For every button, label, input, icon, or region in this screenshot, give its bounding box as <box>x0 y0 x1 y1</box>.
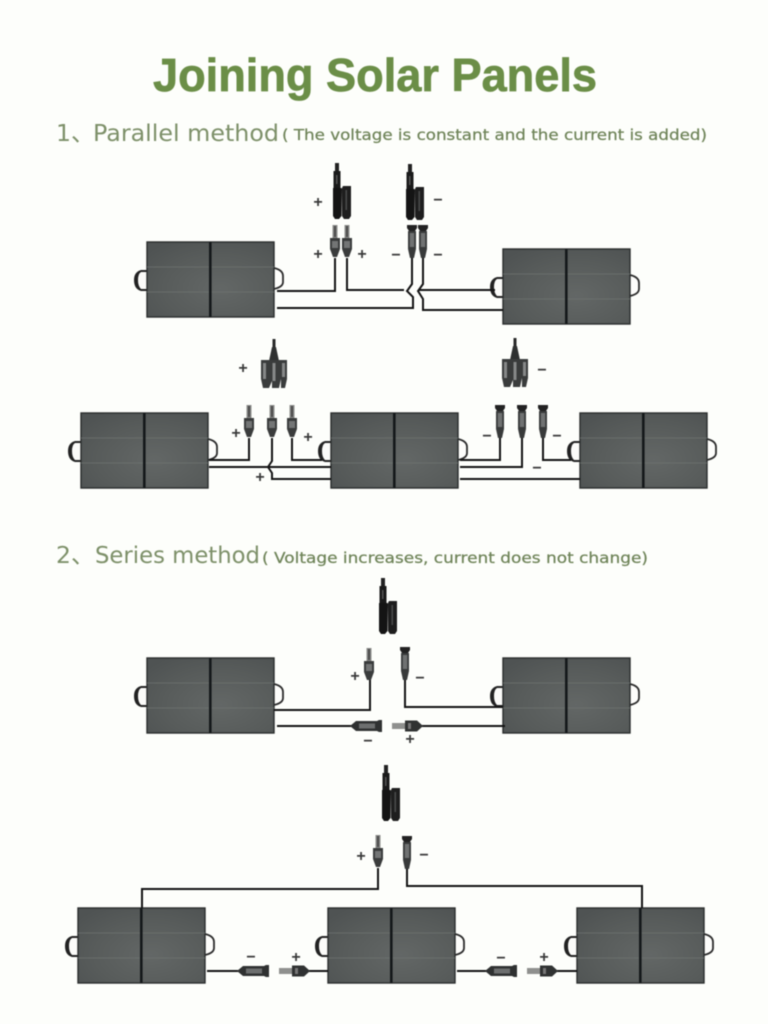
panel: middle solar panel <box>318 413 467 488</box>
polarity labels: − <box>363 733 373 750</box>
polarity labels: + <box>238 360 248 377</box>
connector: plus <box>373 835 383 867</box>
connector: horizontal minus <box>350 720 382 732</box>
connectors: two-way Y minus <box>406 164 424 220</box>
polarity labels: + <box>356 848 366 865</box>
heading: series method: Series method <box>95 541 260 569</box>
polarity labels: + <box>231 425 241 442</box>
connector: horizontal plus <box>392 720 423 732</box>
connector: Y joint <box>379 578 397 634</box>
polarity labels: + <box>255 469 265 486</box>
connector: horizontal plus 1 <box>279 966 310 976</box>
connectors: plus pair <box>330 225 352 257</box>
connector: minus <box>402 836 412 869</box>
connector: horizontal minus 1 <box>237 965 269 977</box>
title: Joining Solar Panels <box>153 49 597 101</box>
polarity labels: − <box>552 428 562 445</box>
polarity labels: + <box>357 246 367 263</box>
connector: horizontal minus 2 <box>485 965 517 977</box>
connectors: three-way minus <box>502 338 528 387</box>
polarity labels: − <box>391 247 401 264</box>
heading: series method <box>56 541 648 569</box>
polarity labels: − <box>532 460 542 477</box>
connectors: plus row <box>244 405 297 437</box>
polarity labels: + <box>303 429 313 446</box>
polarity labels <box>246 847 549 967</box>
panel: right solar panel <box>490 658 639 733</box>
polarity labels: + <box>405 731 415 748</box>
polarity labels: + <box>291 949 301 966</box>
heading: parallel method: Parallel method <box>93 119 279 147</box>
panel: middle solar panel <box>315 908 464 983</box>
heading: parallel method: 1、 <box>56 119 94 147</box>
panel: left solar panel <box>134 242 283 317</box>
panel: right solar panel <box>567 413 716 488</box>
panel: right solar panel <box>564 908 713 983</box>
polarity labels <box>313 192 443 264</box>
heading: parallel method: ( The voltage is constant and the current is added) <box>282 126 707 144</box>
panel: right solar panel <box>490 249 639 324</box>
polarity labels: − <box>537 362 547 379</box>
panel: left solar panel <box>134 658 283 733</box>
polarity labels: + <box>313 194 323 211</box>
polarity labels: − <box>419 847 429 864</box>
connectors: minus row <box>495 405 548 438</box>
polarity labels: − <box>433 247 443 264</box>
connector: Y joint <box>382 765 400 821</box>
heading: parallel method <box>56 119 707 147</box>
diagram: parallel, two panels <box>134 163 639 324</box>
panel: left solar panel <box>68 413 217 488</box>
panel: left solar panel <box>65 908 214 983</box>
connectors: minus pair <box>407 225 428 258</box>
diagram: series, three panels <box>65 765 713 983</box>
connector: minus <box>400 647 410 680</box>
wires <box>277 258 503 310</box>
polarity labels: + <box>539 949 549 966</box>
wires <box>274 680 505 726</box>
connectors: three-way plus <box>261 339 287 388</box>
polarity labels: + <box>350 668 360 685</box>
diagram: series, two panels <box>134 578 639 750</box>
connectors: two-way Y plus <box>333 163 351 219</box>
polarity labels: + <box>313 246 323 263</box>
polarity labels: − <box>415 670 425 687</box>
diagram: parallel, three panels <box>68 338 716 488</box>
wires <box>209 438 580 479</box>
polarity labels: − <box>482 428 492 445</box>
polarity labels: − <box>433 192 443 209</box>
heading: series method: 2、 <box>56 541 94 569</box>
connector: plus <box>364 648 374 680</box>
connector: horizontal plus 2 <box>527 966 558 976</box>
polarity labels <box>231 360 562 486</box>
heading: series method: ( Voltage increases, current does not change) <box>262 549 648 567</box>
polarity labels: − <box>246 949 256 966</box>
wires <box>142 868 642 971</box>
polarity labels: − <box>496 950 506 967</box>
polarity labels <box>350 668 425 750</box>
